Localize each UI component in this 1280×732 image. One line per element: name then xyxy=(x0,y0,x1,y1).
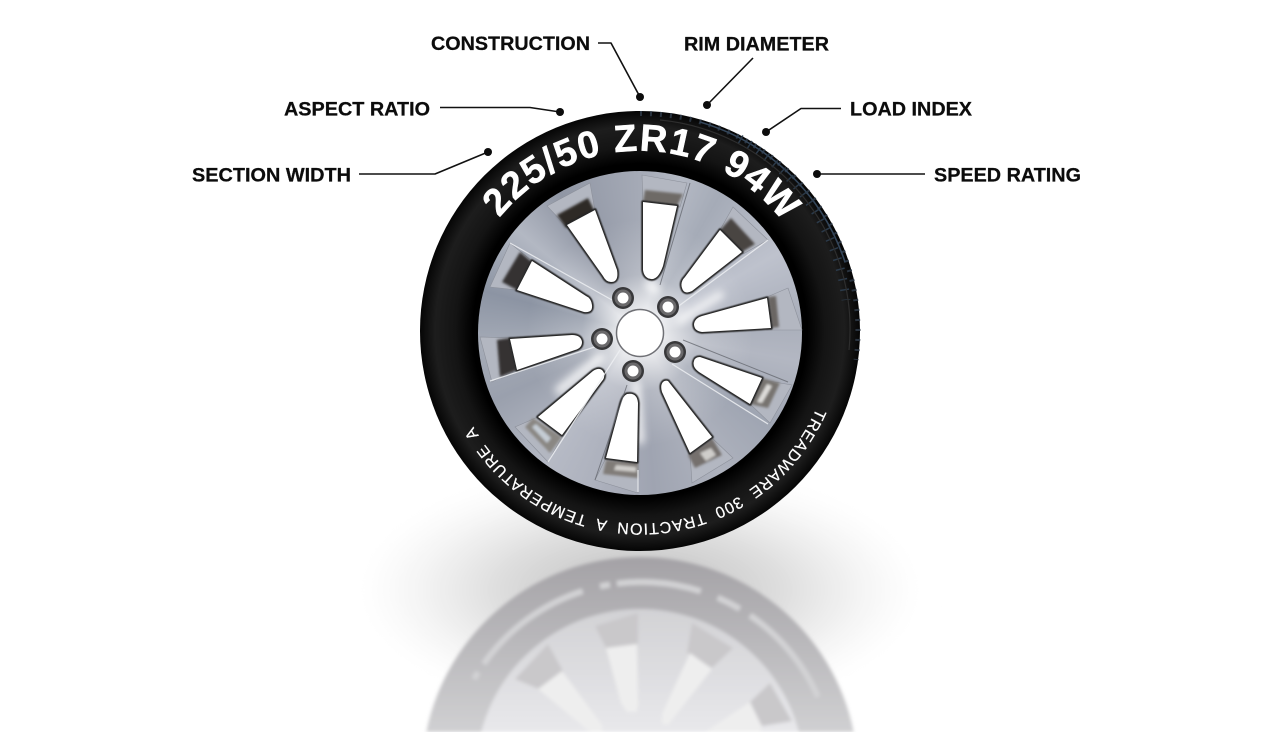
spoke highlights xyxy=(560,285,720,440)
barrel inner shadows xyxy=(497,190,780,478)
callout: section width: SECTION WIDTH xyxy=(192,166,351,186)
callout: speed rating xyxy=(813,166,1081,186)
spoke windows xyxy=(510,202,771,462)
callout: load index xyxy=(762,100,972,136)
callout: section width xyxy=(192,148,492,186)
barrel lips behind windows xyxy=(480,175,802,493)
spoke crease lines xyxy=(490,240,768,492)
tread blocks xyxy=(640,113,858,360)
callout: aspect ratio xyxy=(284,100,564,120)
callout: aspect ratio: ASPECT RATIO xyxy=(284,100,430,120)
UTQG marking: TREADWARE 300 TRACTION A TEMPERATURE A xyxy=(466,412,827,535)
callout: rim diameter: RIM DIAMETER xyxy=(684,34,829,56)
tire xyxy=(420,111,860,551)
rim xyxy=(478,171,802,495)
tire reflection xyxy=(426,557,854,732)
tire size marking: 225/50 ZR17 94W xyxy=(484,124,803,218)
lug holes xyxy=(591,287,686,382)
rim hub highlight xyxy=(478,171,802,495)
callout: rim diameter xyxy=(684,34,829,109)
tire body xyxy=(420,111,860,551)
centre bore xyxy=(616,310,664,356)
callout: load index: LOAD INDEX xyxy=(850,100,972,120)
callout: construction xyxy=(431,34,644,101)
rim base with spoke shading xyxy=(478,171,802,495)
callout: construction: CONSTRUCTION xyxy=(431,34,590,55)
callout: speed rating: SPEED RATING xyxy=(934,166,1081,186)
window shadow edges xyxy=(510,202,771,462)
ground shadow xyxy=(365,472,915,708)
